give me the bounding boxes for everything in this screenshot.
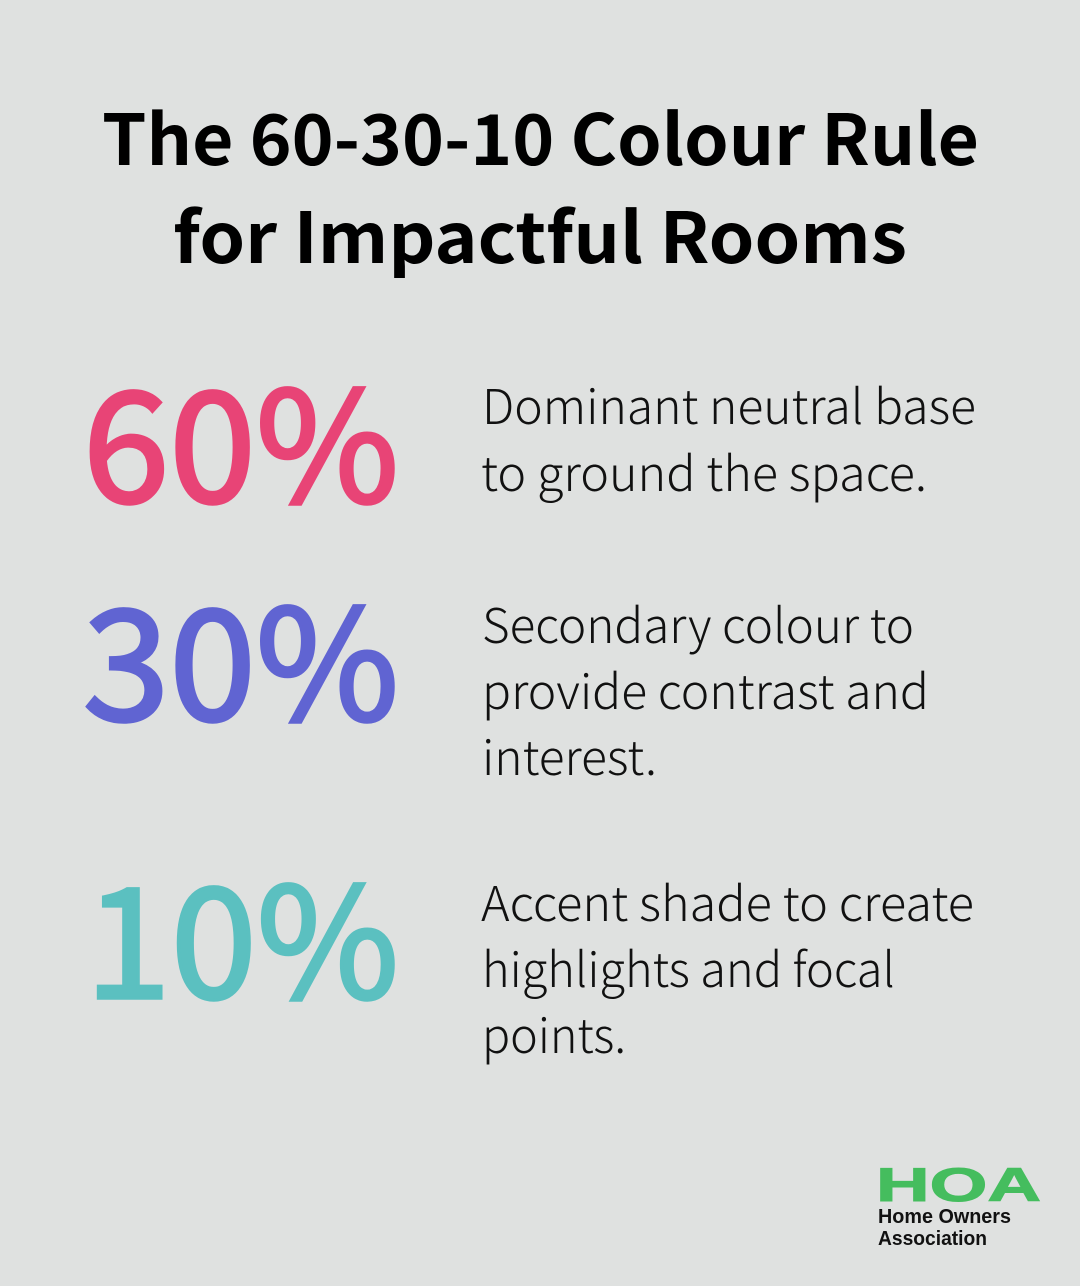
text: dominant neutral base bbox=[481, 368, 976, 505]
text: secondary colour: provide contrast and bbox=[482, 653, 929, 723]
stat: 60%: 60% bbox=[83, 326, 399, 547]
text: dominant neutral base: Dominant neutral base bbox=[482, 368, 976, 438]
text: accent shade: highlights and focal bbox=[482, 931, 895, 1001]
logo: Home Owners Association: HOA bbox=[876, 1158, 1041, 1211]
row: 10 percent bbox=[85, 822, 974, 1067]
text: accent shade bbox=[481, 865, 974, 1067]
title bbox=[102, 85, 979, 284]
row: 30 percent bbox=[83, 544, 929, 789]
text: dominant neutral base: to ground the space. bbox=[481, 435, 927, 505]
row: 60 percent bbox=[83, 326, 976, 547]
text: accent shade: points. bbox=[482, 997, 626, 1067]
stat: 10%: 10% bbox=[85, 822, 399, 1043]
title: for Impactful Rooms bbox=[173, 183, 907, 284]
text: secondary colour: Secondary colour to bbox=[482, 587, 914, 657]
logo: Home Owners Association bbox=[876, 1158, 1041, 1250]
text: secondary colour: interest. bbox=[482, 719, 657, 789]
logo: Home Owners Association: Association bbox=[878, 1228, 987, 1250]
stat: 30%: 30% bbox=[83, 544, 399, 765]
text: accent shade: Accent shade to create bbox=[481, 865, 974, 935]
text: secondary colour bbox=[482, 587, 929, 789]
title: The 60-30-10 Colour Rule bbox=[102, 85, 979, 186]
logo: Home Owners Association: Home Owners bbox=[878, 1206, 1011, 1228]
